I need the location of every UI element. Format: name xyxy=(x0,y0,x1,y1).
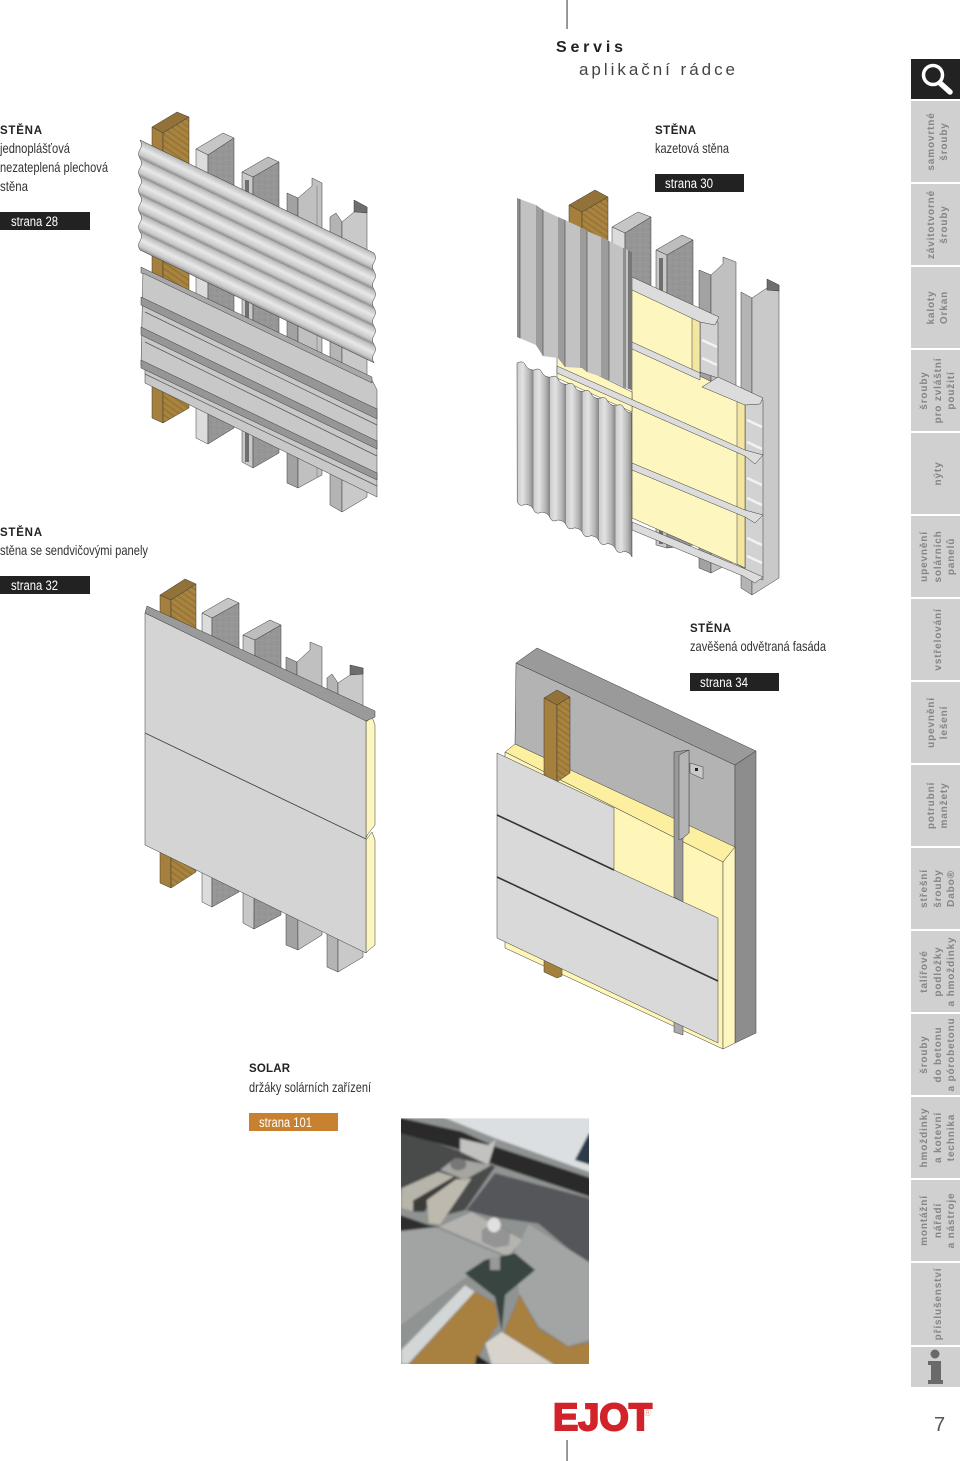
text block: kazetová stěna xyxy=(655,124,744,192)
cladding slabs xyxy=(497,753,718,1043)
text block: odvětraná fasáda: strana 34 xyxy=(700,675,748,690)
tab: šrouby do betonu a pórobetonu: a pórobetonu xyxy=(946,1017,957,1092)
tab: příslušenství: příslušenství xyxy=(933,1267,944,1340)
tab: šrouby do betonu a pórobetonu: do betonu xyxy=(933,1027,944,1082)
text block: solar: strana 101 xyxy=(259,1115,312,1130)
text block: sendvičové panely xyxy=(0,526,148,594)
sidebar navigation xyxy=(911,59,960,1387)
tab: potrubní manžety: manžety xyxy=(939,783,950,828)
tab: nýty xyxy=(911,433,960,514)
diagram: sandwich panel wall xyxy=(145,579,375,972)
diagram: single-skin sheet wall xyxy=(138,112,377,512)
tab: samovrtné šrouby: šrouby xyxy=(939,122,950,161)
logo: EJOT: EJOT xyxy=(553,1397,652,1439)
text block: solar: SOLAR xyxy=(249,1063,291,1075)
insulation xyxy=(557,288,745,568)
tab: upevnění solárních panelů: panelů xyxy=(945,538,957,575)
tab: upevnění solárních panelů xyxy=(911,516,960,597)
tab: šrouby pro zvláštní použití xyxy=(911,350,960,431)
tab: vstřelování xyxy=(911,599,960,680)
text block: kazetová stěna: STĚNA xyxy=(655,124,696,137)
logo: EJOT: ® xyxy=(644,1408,652,1419)
photo: solar mount clamp xyxy=(401,1118,589,1364)
tab: závitotvorné šrouby: závitotvorné xyxy=(926,190,937,259)
tab: šrouby pro zvláštní použití: použití xyxy=(946,371,957,410)
tab: hmoždinky a kotevní technika xyxy=(911,1097,960,1178)
text block: sendvičové panely: STĚNA xyxy=(0,526,42,539)
tab: upevnění solárních panelů: upevnění xyxy=(919,531,930,582)
text block: sendvičové panely: strana 32 xyxy=(11,578,58,593)
text block: jednoplášťová stěna: jednoplášťová xyxy=(0,140,70,156)
top vertical rule xyxy=(566,0,568,29)
metal rail and bracket xyxy=(674,750,703,1035)
tab: vstřelování: vstřelování xyxy=(933,608,944,671)
tab: potrubní manžety: potrubní xyxy=(926,781,937,829)
tab: montážní nářadí a nástroje: a nástroje xyxy=(946,1193,957,1248)
tab: šrouby pro zvláštní použití: šrouby xyxy=(919,371,930,410)
diagram: ventilated facade xyxy=(497,648,756,1049)
tab: montážní nářadí a nástroje: nářadí xyxy=(933,1203,944,1238)
sandwich panels xyxy=(145,613,366,953)
trapezoidal vertical sheet xyxy=(517,190,632,395)
text block: jednoplášťová stěna: STĚNA xyxy=(0,124,42,137)
text block: solar: držáky solárních zařízení xyxy=(249,1079,371,1095)
text block: odvětraná fasáda: zavěšená odvětraná fasáda xyxy=(690,638,826,654)
tab: závitotvorné šrouby: šrouby xyxy=(939,205,950,244)
page number: 7 xyxy=(934,1414,945,1436)
search tab xyxy=(911,59,960,99)
tab: upevnění lešení: lešení xyxy=(939,705,950,739)
text block: jednoplášťová stěna xyxy=(0,124,108,230)
tab: samovrtné šrouby: samovrtné xyxy=(926,112,937,171)
tab: hmoždinky a kotevní technika: hmoždinky xyxy=(919,1108,930,1167)
tab: střešní šrouby Dabo: střešní xyxy=(919,869,930,908)
tab: závitotvorné šrouby xyxy=(911,184,960,265)
panel top rib xyxy=(145,606,375,721)
title: Servis xyxy=(556,39,623,56)
info tab xyxy=(911,1347,960,1387)
tab: kaloty Orkan xyxy=(911,267,960,348)
text block: jednoplášťová stěna: nezateplená plechová xyxy=(0,159,108,175)
bottom vertical rule xyxy=(566,1440,568,1461)
tab: talířové podložky a hmoždinky: podložky xyxy=(933,946,944,997)
tab: upevnění solárních panelů: solárních xyxy=(933,530,944,583)
tab: kaloty Orkan: Orkan xyxy=(939,291,950,324)
tab: talířové podložky a hmoždinky: a hmoždinky xyxy=(946,937,957,1006)
corrugated vertical sheet xyxy=(517,362,632,557)
tab: upevnění lešení xyxy=(911,682,960,763)
timber batten xyxy=(544,690,570,978)
foam core edges xyxy=(366,717,375,953)
tab: samovrtné šrouby xyxy=(911,101,960,182)
tab: střešní šrouby Dabo xyxy=(911,848,960,929)
text block: solar xyxy=(249,1063,371,1131)
text block: odvětraná fasáda: STĚNA xyxy=(690,622,731,635)
tab: potrubní manžety xyxy=(911,765,960,846)
upper corrugated sheet xyxy=(138,140,376,363)
lower trapezoidal sheet xyxy=(141,267,377,497)
text block: sendvičové panely: stěna se sendvičovými panely xyxy=(0,542,148,558)
title xyxy=(556,39,735,79)
tab: hmoždinky a kotevní technika: a kotevní xyxy=(933,1112,944,1163)
tab: příslušenství xyxy=(911,1263,960,1345)
tab: talířové podložky a hmoždinky xyxy=(911,931,960,1012)
insulation layer xyxy=(505,744,735,1049)
tab: nýty: nýty xyxy=(933,462,944,485)
tab: střešní šrouby Dabo: šrouby xyxy=(933,869,944,908)
tab: šrouby do betonu a pórobetonu xyxy=(911,1014,960,1095)
tab: montážní nářadí a nástroje xyxy=(911,1180,960,1261)
tab: střešní šrouby Dabo: Dabo® xyxy=(946,870,957,907)
diagram: cassette wall xyxy=(517,190,779,595)
text block: kazetová stěna: strana 30 xyxy=(665,176,713,191)
tab: talířové podložky a hmoždinky: talířové xyxy=(919,950,930,993)
tab: kaloty Orkan: kaloty xyxy=(926,290,937,325)
text block: jednoplášťová stěna: strana 28 xyxy=(11,214,58,229)
cassette rails xyxy=(557,277,763,583)
cassette trays xyxy=(700,320,763,580)
tab: šrouby pro zvláštní použití: pro zvláštní xyxy=(933,357,944,423)
title: aplikační rádce xyxy=(579,60,735,79)
tab: montážní nářadí a nástroje: montážní xyxy=(919,1195,930,1246)
text block: odvětraná fasáda xyxy=(690,622,826,691)
tab: šrouby do betonu a pórobetonu: šrouby xyxy=(919,1035,930,1074)
text block: jednoplášťová stěna: stěna xyxy=(0,178,28,194)
tab: hmoždinky a kotevní technika: technika xyxy=(946,1114,957,1161)
text block: kazetová stěna: kazetová stěna xyxy=(655,140,729,156)
tab: upevnění lešení: upevnění xyxy=(926,697,937,748)
